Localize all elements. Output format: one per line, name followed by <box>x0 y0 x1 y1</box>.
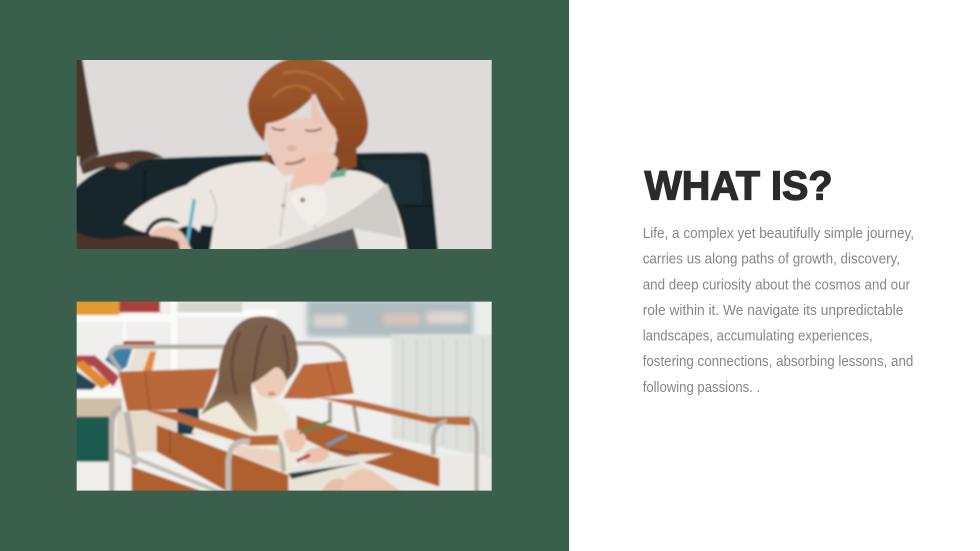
body text: and deep curiosity about the cosmos and our <box>643 276 910 293</box>
face <box>252 366 288 398</box>
drawing hand <box>150 226 193 253</box>
body text: role within it. We navigate its unpredictable <box>643 302 903 319</box>
left armrest <box>145 410 279 446</box>
chair metal back rail <box>110 343 345 370</box>
clipboard <box>287 454 393 475</box>
body text: landscapes, accumulating experiences, <box>643 328 873 345</box>
green box <box>73 417 109 462</box>
body text <box>643 225 914 396</box>
body text: Life, a complex yet beautifully simple journey, <box>643 225 914 242</box>
white shirt <box>123 162 407 253</box>
bright window and street <box>304 302 476 339</box>
pencils <box>299 421 330 433</box>
right seat sling <box>297 416 439 487</box>
leaning books <box>73 356 119 387</box>
dark gap beside arm <box>198 224 214 249</box>
chrome front rails <box>228 441 250 495</box>
left seat sling <box>157 425 288 495</box>
lap <box>234 446 282 470</box>
hands <box>283 429 306 453</box>
hair <box>201 316 298 432</box>
adult hand on couch <box>80 150 163 174</box>
photo: girl with long hair drawing in an orange leather chair <box>73 298 495 495</box>
legs <box>322 478 346 491</box>
face <box>265 118 338 176</box>
front lower rail <box>115 450 227 495</box>
hand on cheek <box>289 151 338 192</box>
adult hand bottom left <box>76 230 182 249</box>
photo: boy with red hair drawing on a black couch <box>72 57 495 253</box>
dress <box>190 394 296 484</box>
floor <box>376 466 442 485</box>
body text: fostering connections, absorbing lessons, and <box>643 353 913 370</box>
title: WHAT IS? <box>644 162 832 208</box>
adult arm <box>76 60 100 165</box>
bookshelf <box>73 298 277 388</box>
chair rear legs <box>112 407 122 495</box>
right armrest <box>318 398 470 426</box>
body text: carries us along paths of growth, discovery, <box>643 251 900 268</box>
hair <box>248 57 368 150</box>
dark book behind girl <box>177 408 199 434</box>
books on shelf top <box>76 302 122 316</box>
radiator <box>392 334 495 458</box>
black couch <box>73 152 438 253</box>
blue pencil <box>184 198 197 244</box>
chair leather back <box>118 368 218 411</box>
paper <box>262 182 403 249</box>
braid of hair behind neck <box>333 140 357 172</box>
body text: following passions. . <box>643 379 760 396</box>
panel: green background <box>0 0 569 551</box>
sleeve cuff and watch <box>145 217 180 235</box>
